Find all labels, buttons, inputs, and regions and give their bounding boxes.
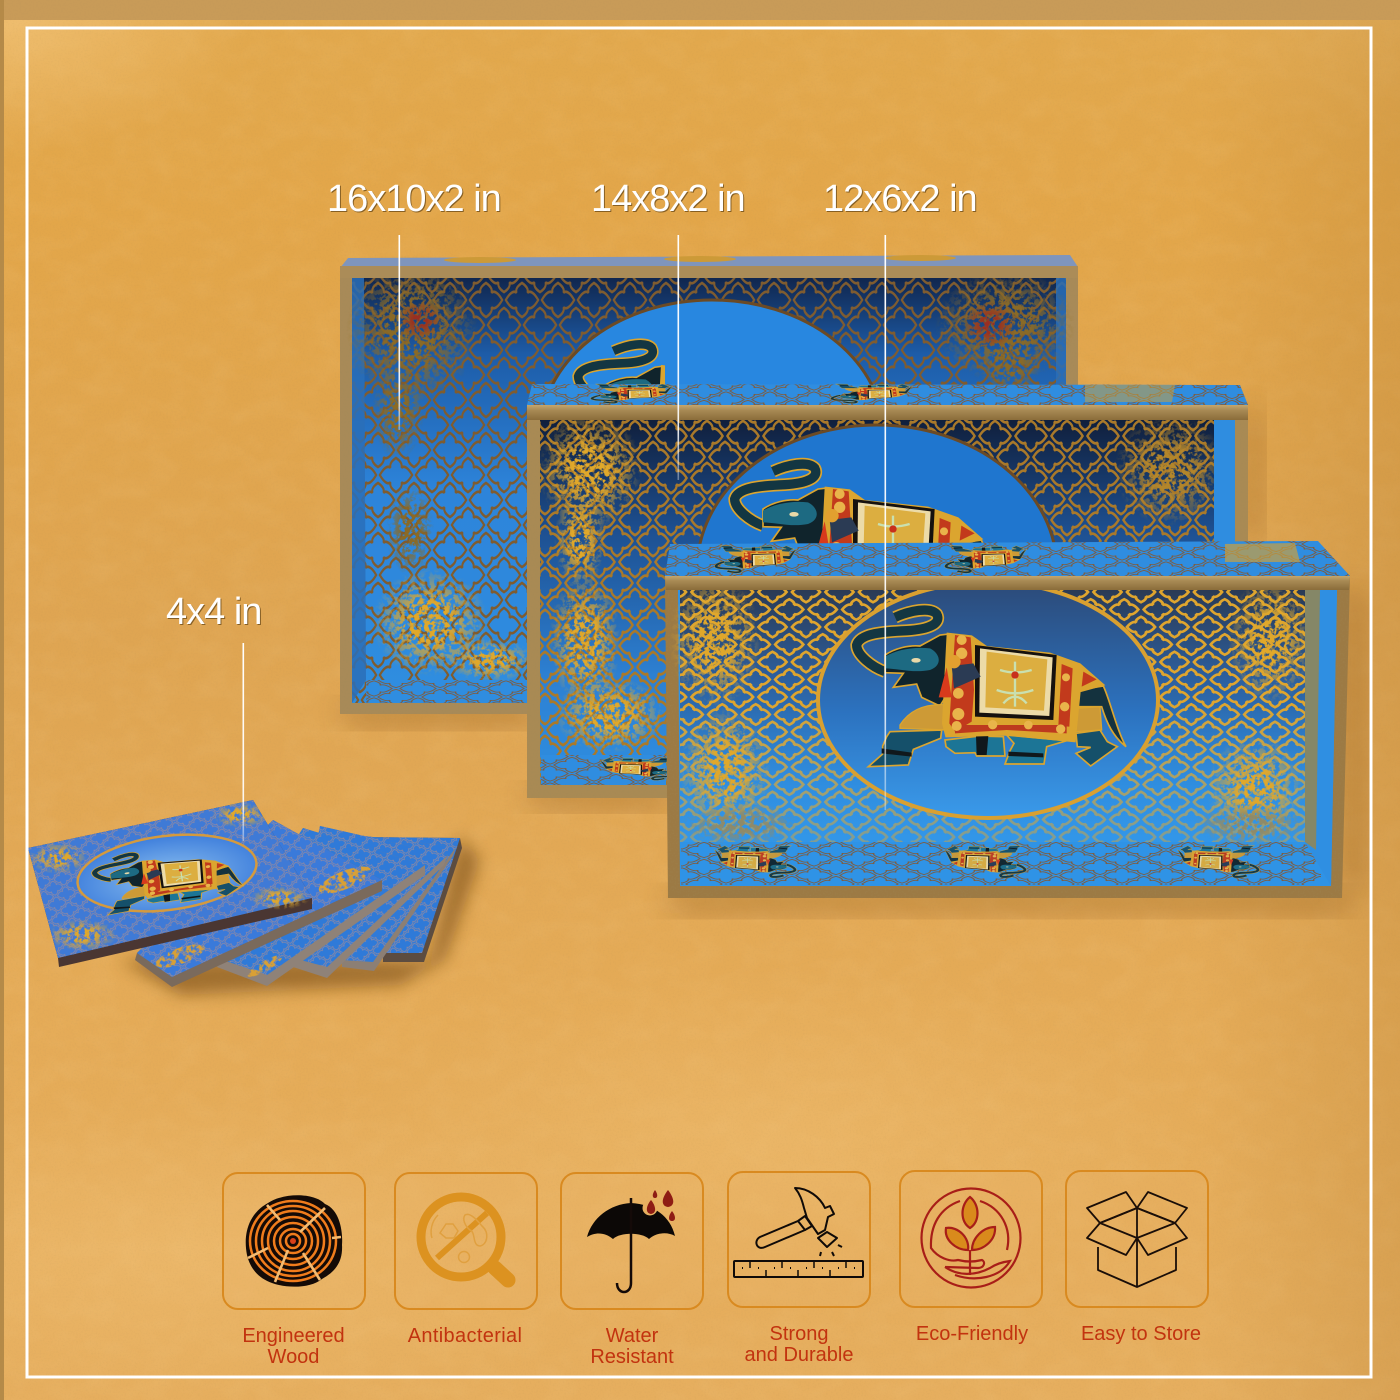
tray 3 top rim — [665, 541, 1350, 590]
icon: hammer and ruler — [734, 1188, 863, 1277]
feature: strong and durable — [728, 1172, 870, 1366]
tray 2 bottom wall — [541, 755, 675, 785]
small tray 12x6x2 — [665, 541, 1350, 898]
coaster 6 — [353, 837, 462, 962]
label 14x8x2 in: 14x8x2 in — [591, 178, 745, 220]
icon: umbrella with droplets — [587, 1190, 675, 1292]
label: Strong and Durable: and Durable — [745, 1344, 853, 1366]
tray 1 top rim — [340, 255, 1078, 268]
tray 3 bottom wall with mirrored elephants — [681, 842, 1321, 885]
label: Water Resistant: Water — [606, 1325, 659, 1347]
stack of six coasters — [28, 800, 462, 987]
icon: magnifier with crossed bacteria — [421, 1197, 508, 1280]
tray 2 right wall — [1214, 420, 1235, 545]
label 16x10x2 in: 16x10x2 in — [327, 178, 501, 220]
feature: easy to store — [1066, 1171, 1208, 1345]
tray 1 side walls — [352, 278, 1066, 703]
leader line 12x6x2 — [884, 235, 886, 810]
label 12x6x2 in: 12x6x2 in — [823, 178, 977, 220]
coaster 5 — [340, 833, 456, 971]
label: Engineered Wood: Wood — [268, 1346, 319, 1368]
tray 3 floral corners — [669, 572, 1312, 846]
tray 1 floral corners — [346, 255, 1075, 682]
coaster set shadow — [120, 835, 480, 995]
icon: open box — [1087, 1192, 1187, 1287]
feature: eco-friendly — [900, 1171, 1042, 1345]
coaster 3 — [217, 828, 425, 986]
large tray 16x10x2 — [340, 255, 1078, 714]
coaster 2 — [135, 820, 382, 987]
label: Water Resistant: Resistant — [590, 1346, 674, 1368]
tray 2 medallion — [697, 425, 1057, 715]
feature: antibacterial — [395, 1173, 537, 1347]
leader line 4x4 — [242, 643, 244, 841]
tray 1 medallion — [551, 298, 874, 384]
tray 2 top rim — [527, 384, 1248, 420]
coaster 4 — [293, 826, 448, 978]
feature: water resistant — [561, 1173, 703, 1368]
tray shadows on the surface — [345, 410, 1366, 914]
label: Strong and Durable: Strong — [770, 1323, 828, 1345]
coaster 1 with elephant medallion — [28, 800, 312, 967]
label: Easy to Store: Easy to Store — [1081, 1323, 1201, 1345]
icon: wood log rings — [246, 1195, 342, 1287]
leader line 16x10x2 behind-front tray — [398, 235, 400, 430]
label: Engineered Wood: Engineered — [242, 1325, 345, 1347]
tray 1 bottom wall — [366, 680, 531, 703]
label: Antibacterial: Antibacterial — [408, 1325, 522, 1347]
medium tray 14x8x2 — [527, 384, 1248, 798]
feature: engineered wood — [223, 1173, 365, 1368]
label 4x4 in: 4x4 in — [166, 591, 261, 633]
tray 3 right wall — [1305, 590, 1337, 886]
tray 2 floral corners — [538, 410, 1226, 753]
leader line 14x8x2 — [678, 235, 679, 480]
icon: plant in hand — [922, 1188, 1020, 1288]
tray 3 medallion with elephant — [818, 582, 1158, 818]
label: Eco-Friendly: Eco-Friendly — [916, 1323, 1028, 1345]
